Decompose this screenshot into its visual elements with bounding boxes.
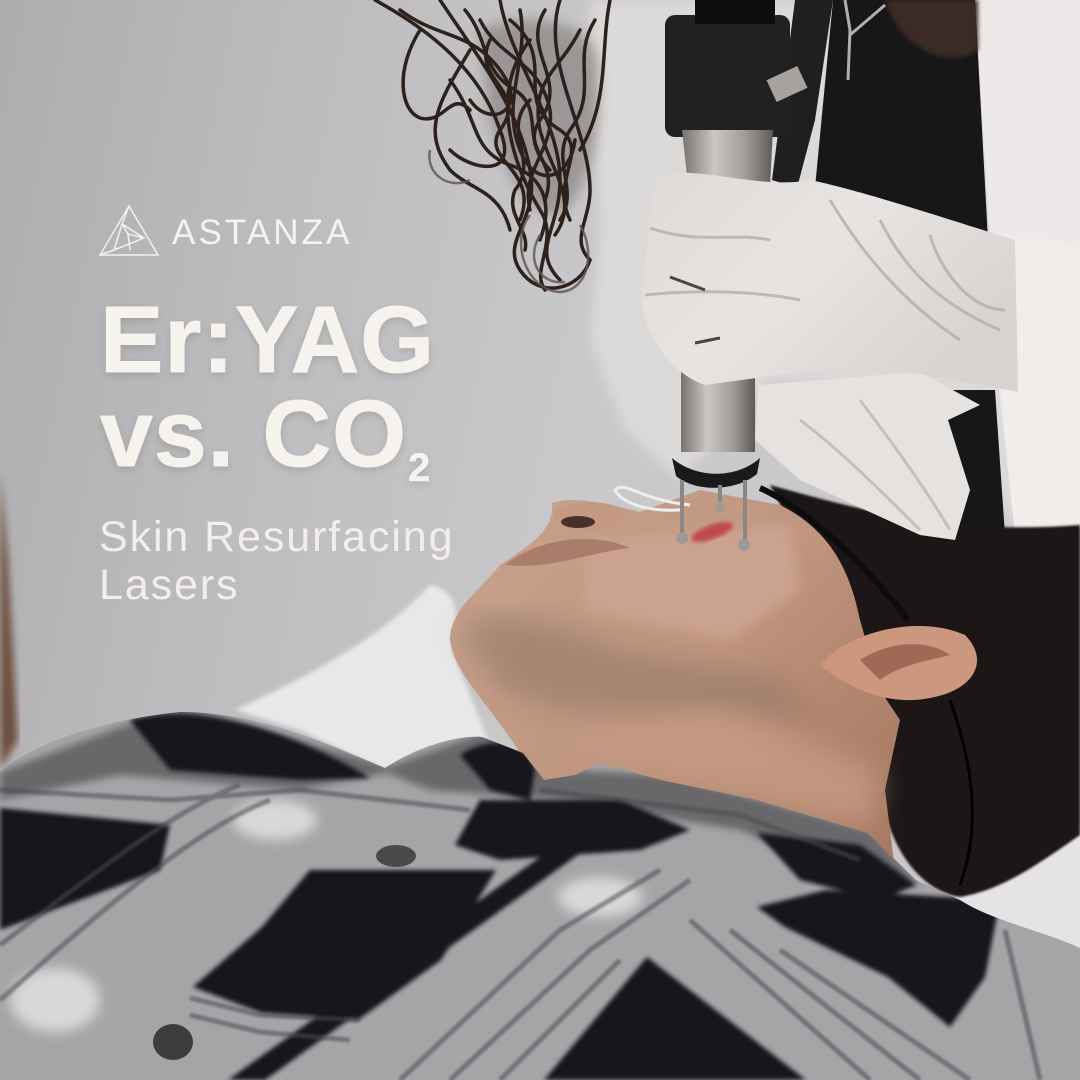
glove finger creases	[670, 277, 720, 343]
darker woven yoke and collar	[0, 705, 920, 885]
treated skin patch	[585, 525, 800, 640]
curly hair of practitioner	[375, 0, 610, 292]
pillow	[235, 585, 490, 770]
plaid shirt	[0, 700, 1080, 1080]
nostril and lips	[554, 502, 626, 530]
bedding at right	[950, 825, 1080, 955]
red laser mark	[689, 518, 735, 546]
patient face and neck	[450, 490, 900, 870]
dark shirt panels	[0, 714, 1000, 1080]
wooden edge at left	[0, 470, 18, 770]
glasses arm	[760, 488, 908, 620]
subtitle	[99, 513, 454, 609]
shirt buttons	[376, 845, 416, 867]
stubble on the jaw	[460, 615, 820, 720]
title: vs. CO2	[100, 381, 430, 490]
patient dark hair	[770, 485, 1080, 897]
three-point probe	[676, 480, 750, 551]
neck shadow under the jaw	[560, 710, 880, 830]
brand logo	[98, 204, 353, 256]
brand name: ASTANZA	[172, 213, 353, 252]
subtitle: Skin Resurfacing	[99, 513, 454, 561]
plaid stripes	[0, 785, 1040, 1080]
gloved hand lower	[755, 372, 980, 540]
icon: triangle logo	[98, 204, 160, 256]
title	[100, 287, 435, 490]
light plaid highlights	[10, 800, 642, 1032]
cable	[615, 487, 690, 510]
practitioner's hair at top of vest	[885, 0, 978, 58]
white coat	[590, 0, 1080, 535]
gloved hand upper	[642, 173, 1018, 392]
subtitle: Lasers	[99, 561, 239, 609]
title: Er:YAG	[100, 287, 435, 393]
ear	[820, 626, 977, 700]
laser handpiece	[665, 0, 833, 488]
necklace	[845, 0, 885, 80]
